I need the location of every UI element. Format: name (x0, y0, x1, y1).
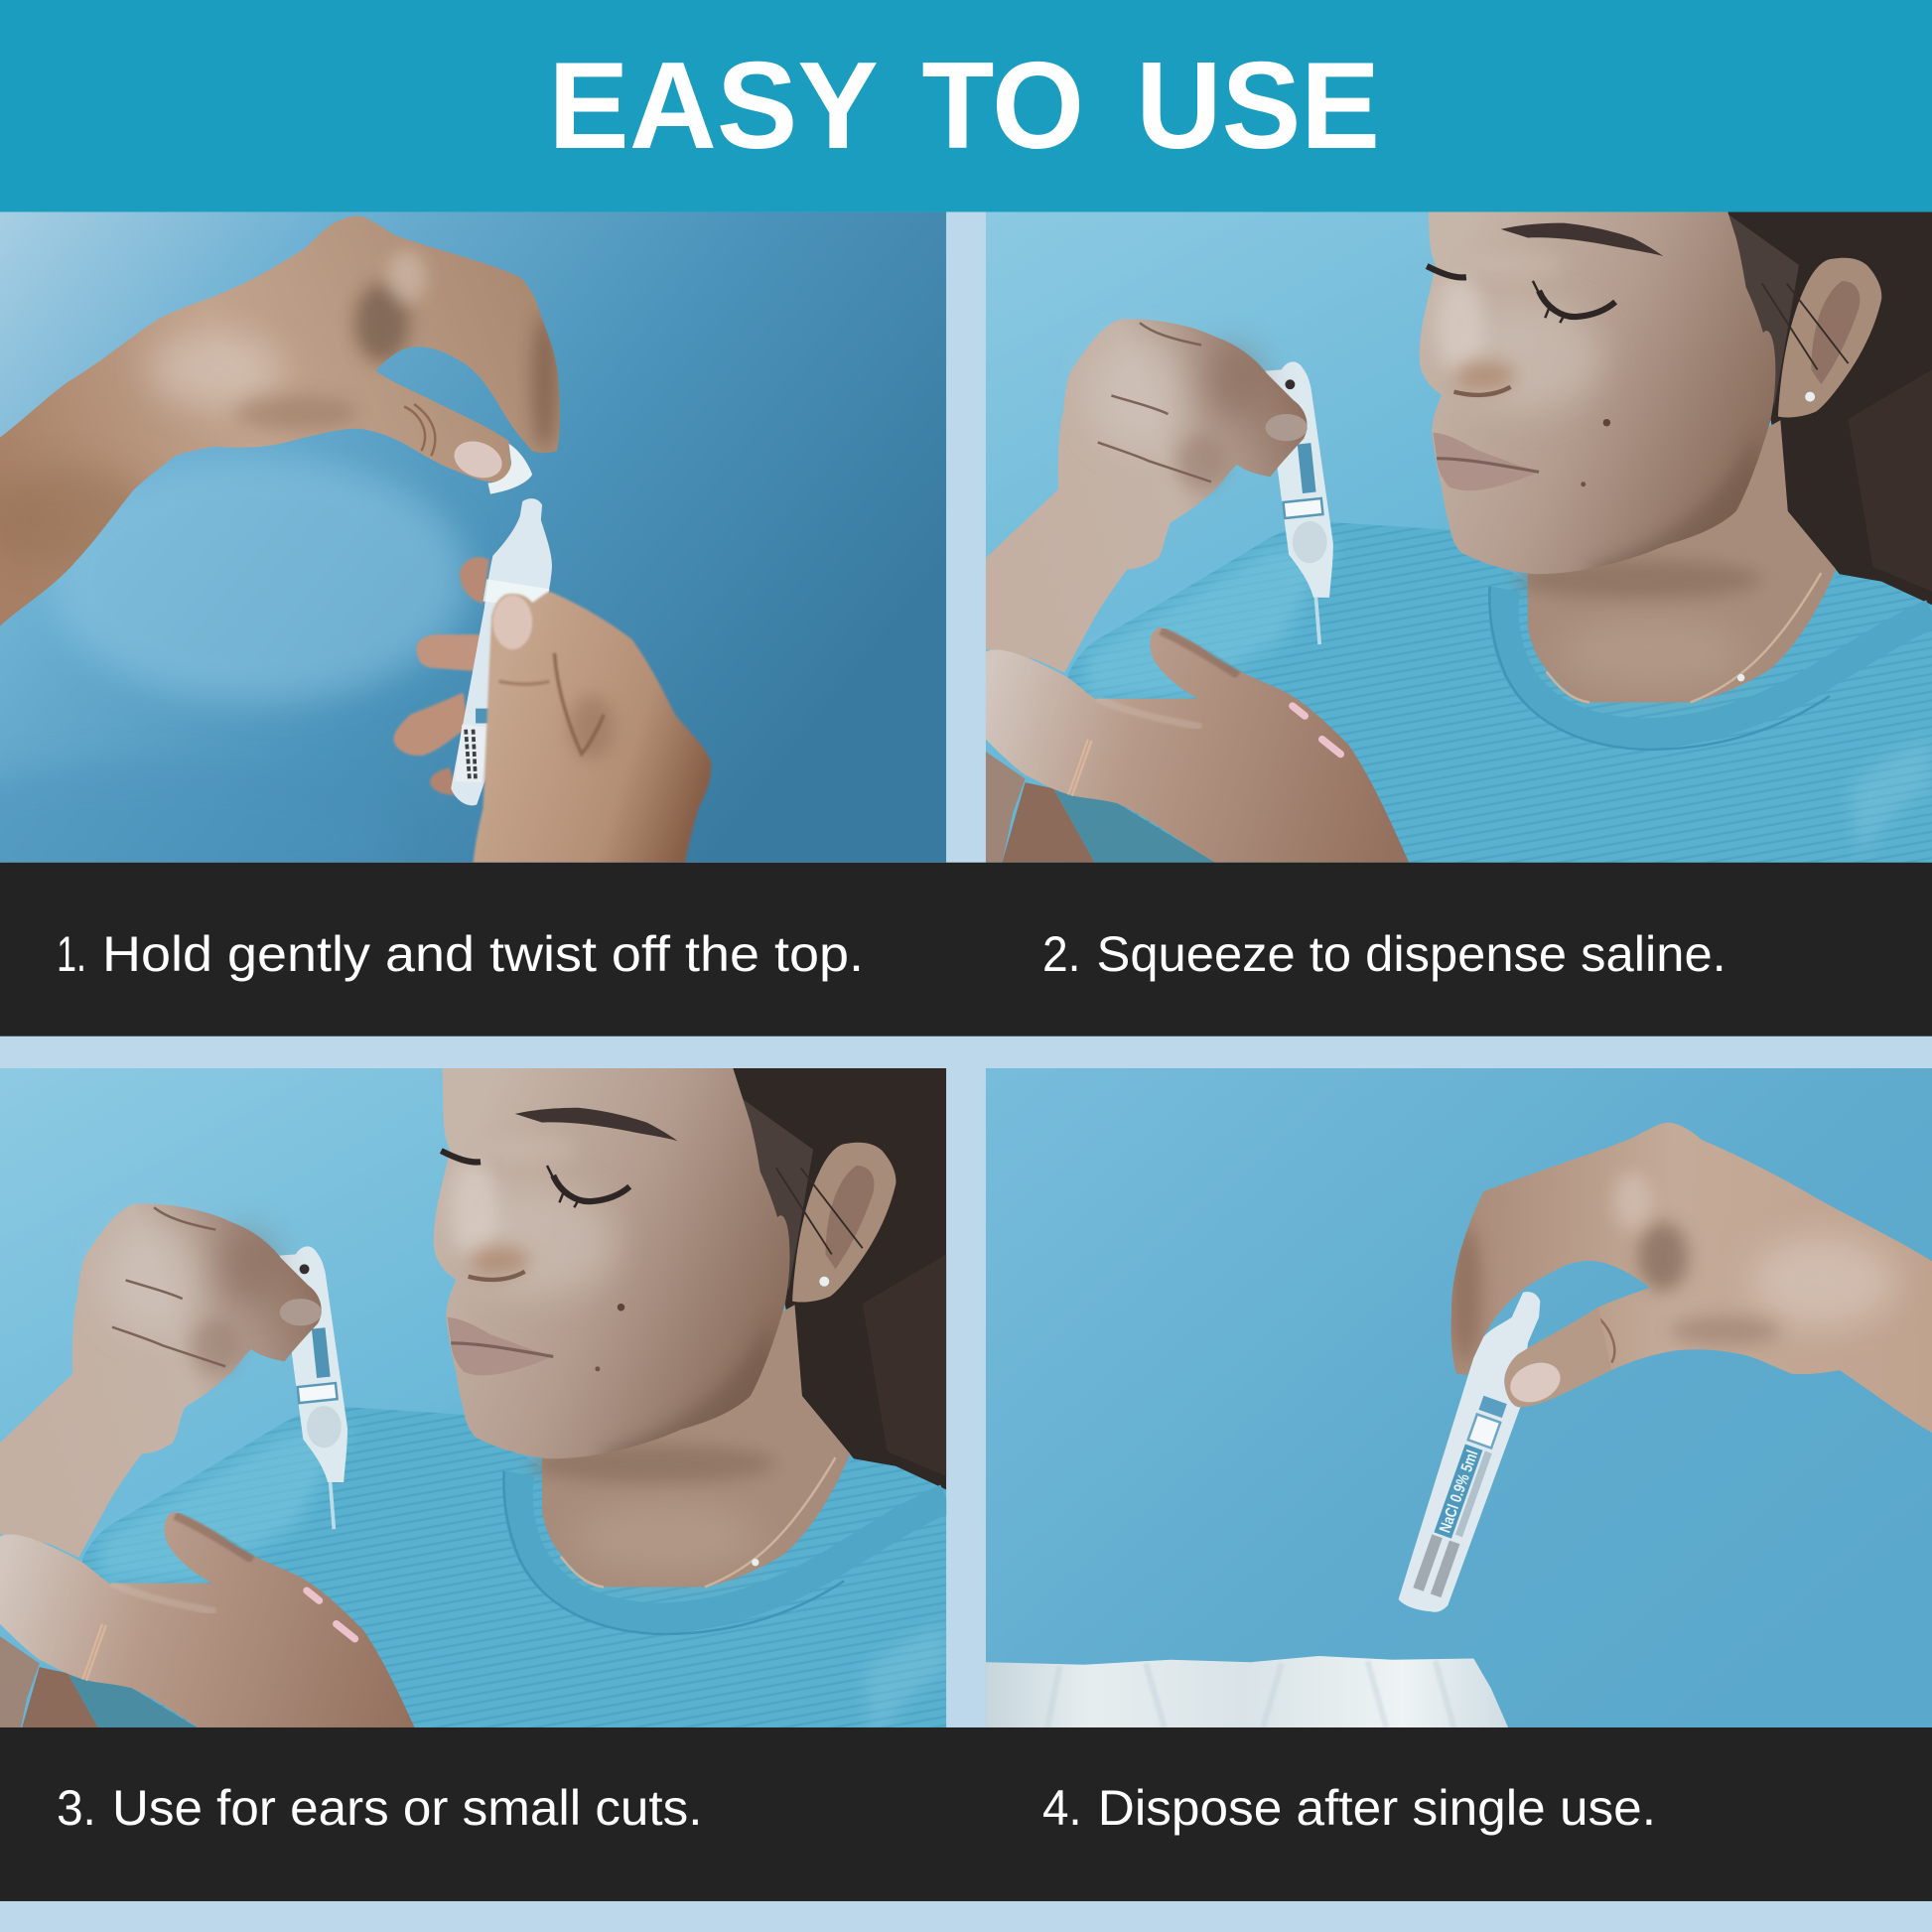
panel: step 3 and 4 caption band (0, 1727, 1932, 1901)
caption: step 1: 1. (57, 926, 86, 982)
title (548, 38, 1380, 175)
title: EASY (548, 38, 879, 175)
caption: step 3: Use for ears or small cuts. (112, 1780, 702, 1836)
caption: step 3: 3. (57, 1780, 96, 1836)
icon: waste bin liner (986, 1656, 1508, 1727)
caption: step 1: Hold gently and twist off the top. (102, 926, 864, 982)
icon: twisted-off cap (487, 444, 532, 494)
icon: upper hand holding cap (0, 211, 567, 637)
icon: hand releasing vial (rear fingers) (1442, 1115, 1932, 1442)
panel: step 3 photo (0, 1068, 947, 1727)
caption: step 4: 4. (1042, 1780, 1082, 1836)
panel: step 1 photo (0, 211, 946, 911)
title: TO (921, 38, 1084, 175)
panel: step 1 and 2 caption band (0, 863, 1932, 1036)
icon: lower hand fingers behind vial (394, 557, 489, 795)
vial label text: NaCl 0.9% 5ml (1436, 1448, 1481, 1535)
icon: saline vial (451, 498, 552, 805)
icon: saline vial dropped (1399, 1292, 1540, 1612)
icon: thumb over vial (1504, 1308, 1611, 1407)
caption: step 4: Dispose after single use. (1098, 1780, 1656, 1836)
caption: step 2: 2. (1042, 926, 1080, 982)
icon: lower hand gripping vial (474, 592, 711, 864)
panel: step 4 photo (986, 1068, 1932, 1727)
header banner (0, 0, 1932, 211)
caption: step 2: Squeeze to dispense saline. (1097, 926, 1726, 982)
title: USE (1136, 38, 1380, 175)
panel: step 2 photo (985, 212, 1932, 863)
